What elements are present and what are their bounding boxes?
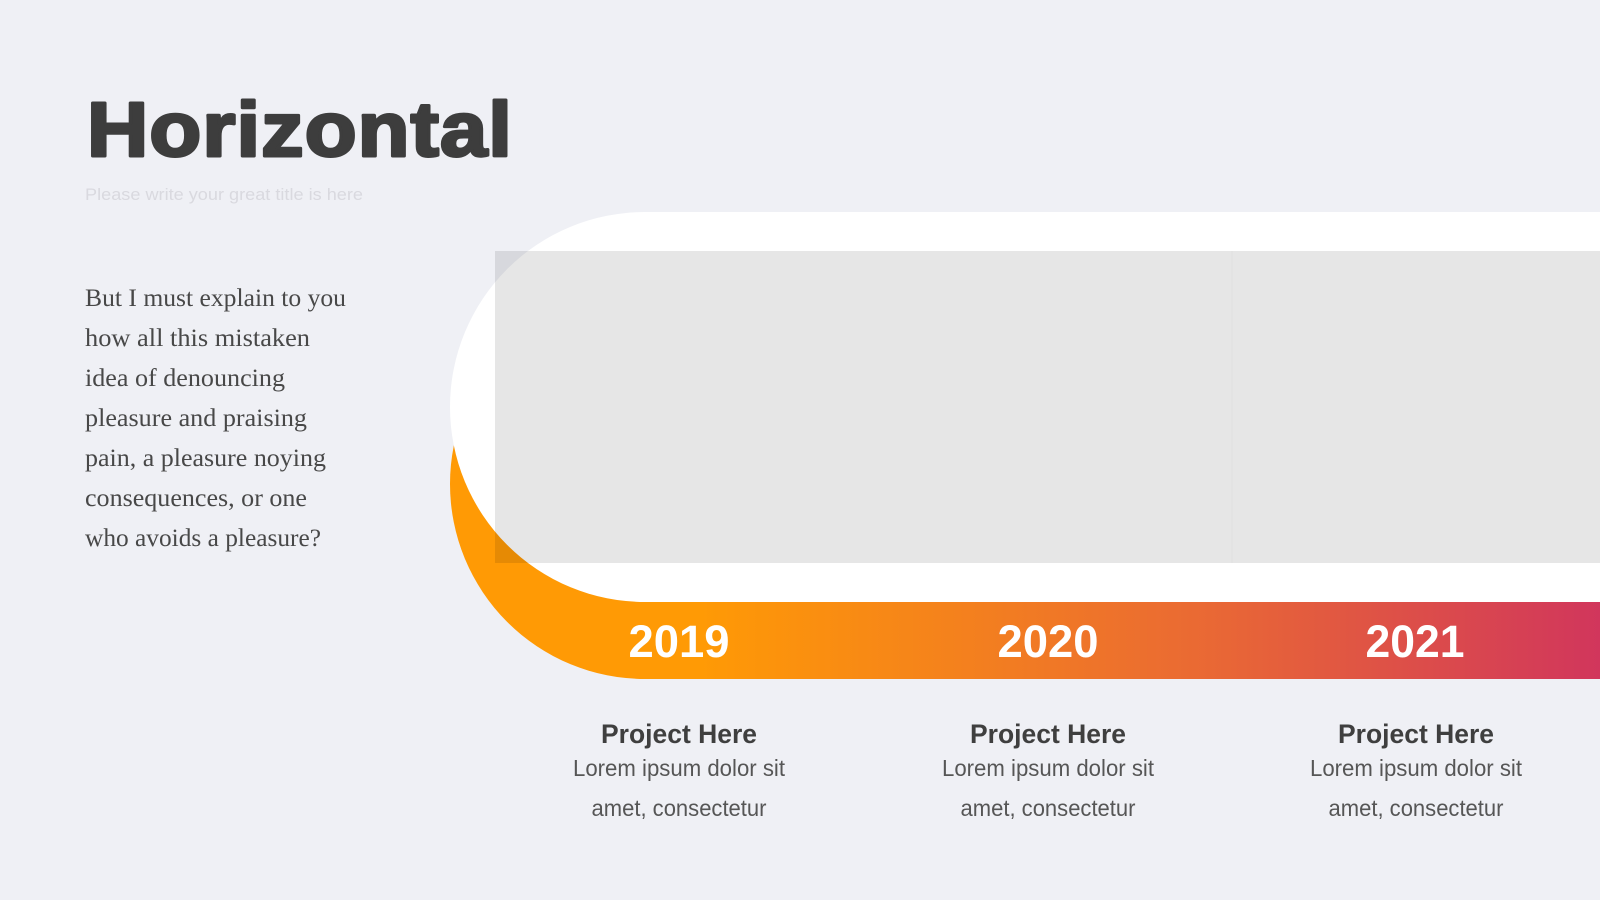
- timeline column: 2019: Project Here: [601, 719, 757, 749]
- timeline column: 2019: 2019: [628, 616, 730, 667]
- timeline column: 2019: Lorem ipsum dolor sit: [573, 755, 786, 781]
- timeline column: 2021: 2021: [1366, 616, 1464, 667]
- timeline column: 2019: amet, consectetur: [592, 795, 767, 821]
- timeline column: 2020: amet, consectetur: [960, 795, 1136, 821]
- body paragraph: [85, 285, 346, 552]
- gray image placeholder: [495, 251, 1600, 563]
- timeline column: 2021: amet, consectetur: [1328, 795, 1504, 821]
- body paragraph: how all this mistaken: [85, 325, 311, 352]
- body paragraph: pleasure and praising: [85, 405, 308, 432]
- timeline column: 2019: [573, 616, 786, 821]
- subtitle: Please write your great title is here: [85, 185, 363, 204]
- body paragraph: who avoids a pleasure?: [85, 525, 321, 552]
- timeline column: 2020: 2020: [998, 616, 1098, 667]
- body paragraph: idea of denouncing: [85, 365, 286, 392]
- timeline column: 2020: [942, 616, 1155, 821]
- body paragraph: But I must explain to you: [85, 285, 346, 312]
- timeline column: 2021: [1310, 616, 1523, 821]
- title: Horizontal: [87, 87, 513, 173]
- timeline column: 2021: Project Here: [1338, 719, 1494, 749]
- body paragraph: consequences, or one: [85, 485, 307, 512]
- timeline column: 2020: Lorem ipsum dolor sit: [942, 755, 1155, 781]
- timeline column: 2021: Lorem ipsum dolor sit: [1310, 755, 1523, 781]
- gradient timeline band: [450, 289, 1600, 679]
- white rounded panel: [450, 212, 1600, 602]
- timeline column: 2020: Project Here: [970, 719, 1126, 749]
- body paragraph: pain, a pleasure noying: [85, 445, 327, 472]
